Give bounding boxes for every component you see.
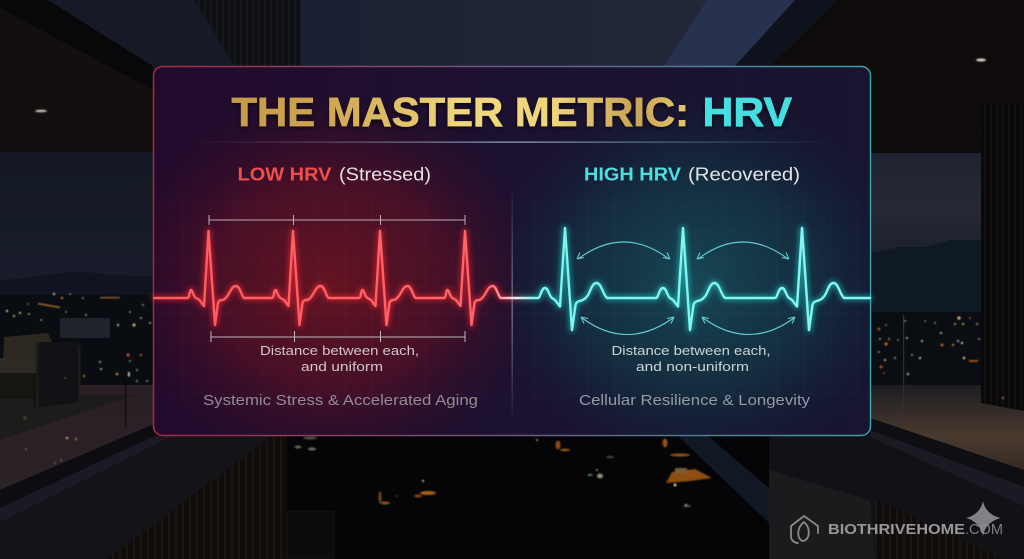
icon: leaf house logo	[791, 516, 818, 543]
title: THE MASTER METRIC:	[232, 89, 689, 135]
background: right pale strip	[870, 430, 1024, 506]
caption: low HRV distance	[260, 343, 419, 374]
caption: low HRV distance: and uniform	[301, 359, 383, 374]
background: left distant towers	[60, 318, 110, 338]
heading: high HRV: HIGH HRV	[584, 164, 682, 184]
background: right city lights	[878, 316, 1004, 399]
background: right city	[870, 312, 982, 387]
background: left concrete wall	[48, 0, 240, 70]
caption: high HRV distance	[612, 343, 770, 374]
background: slatted column	[195, 0, 301, 66]
background: lower right concrete	[769, 436, 1024, 559]
arrow: bottom variable interval 1	[581, 317, 674, 334]
background: right dark fascia	[735, 0, 838, 66]
watermark domain: .COM	[965, 522, 1003, 538]
background: lower slats left	[107, 436, 287, 559]
background: rug	[0, 395, 135, 440]
background: lower concrete left	[0, 436, 287, 559]
background: left city	[0, 295, 154, 390]
background: left floor	[0, 385, 154, 490]
background: left wood ceiling	[0, 8, 153, 152]
chart: bottom distance bracket (low HRV)	[211, 331, 465, 342]
chart: heartbeat trace, red to teal	[154, 228, 870, 330]
panel: red side glow	[154, 120, 512, 435]
background: left lower stripe	[0, 424, 154, 508]
title: HRV	[702, 89, 793, 135]
heading: high HRV	[584, 164, 800, 184]
background: sofa	[0, 333, 81, 408]
background: small balcony railing	[287, 511, 334, 559]
watermark	[791, 501, 1003, 543]
title divider	[190, 142, 840, 143]
background: sky at top	[295, 0, 735, 70]
background: left dark fascia	[0, 0, 153, 90]
watermark wordmark: BIOTHRIVEHOME	[828, 522, 965, 538]
arrow: bottom variable interval 2	[702, 317, 795, 334]
background: right wood ceiling	[770, 0, 1024, 154]
heading: low HRV: LOW HRV	[238, 164, 332, 184]
background: left ceiling light	[35, 110, 47, 112]
background: left hills	[0, 271, 154, 300]
outcome: high HRV: Cellular Resilience & Longevity	[579, 392, 811, 409]
heading: low HRV	[238, 164, 431, 184]
background: lower right slats	[875, 498, 1002, 559]
background: left city lights	[6, 293, 151, 464]
outcome: low HRV: Systemic Stress & Accelerated Aging	[203, 392, 478, 409]
background: night valley below	[287, 436, 770, 559]
background: right slatted column	[981, 104, 1024, 411]
background: lower right textured panels	[769, 470, 875, 559]
caption: high HRV distance: and non-uniform	[636, 359, 749, 374]
background: right ceiling light	[976, 58, 986, 62]
panel: base card	[154, 66, 870, 436]
background: lower right beam	[678, 436, 769, 523]
main panel	[154, 66, 870, 436]
background: right floor	[870, 385, 1024, 470]
background: lower pale strip	[0, 436, 172, 522]
background: left window sky	[0, 152, 154, 282]
background: right blue glass panel	[664, 0, 797, 66]
caption: low HRV distance: Distance between each,	[260, 343, 419, 358]
background: valley lights	[294, 436, 712, 507]
background: right glass post	[903, 315, 904, 425]
icon: sparkle	[966, 501, 1001, 536]
background: right window sky	[870, 153, 982, 263]
background: right dark stripe	[870, 418, 1024, 487]
heading: low HRV: (Stressed)	[339, 164, 431, 184]
panel: centre divider	[512, 185, 513, 425]
chart: top distance bracket (low HRV)	[209, 215, 465, 225]
arrow: top variable interval 2	[697, 242, 789, 259]
background: left glass post	[125, 314, 126, 426]
background: right hills	[870, 240, 982, 320]
caption: high HRV distance: Distance between each,	[612, 343, 770, 358]
heading: high HRV: (Recovered)	[688, 164, 800, 184]
panel: teal side glow	[520, 130, 870, 435]
panel: chart grid	[182, 204, 858, 394]
arrow: top variable interval 1	[577, 242, 670, 259]
